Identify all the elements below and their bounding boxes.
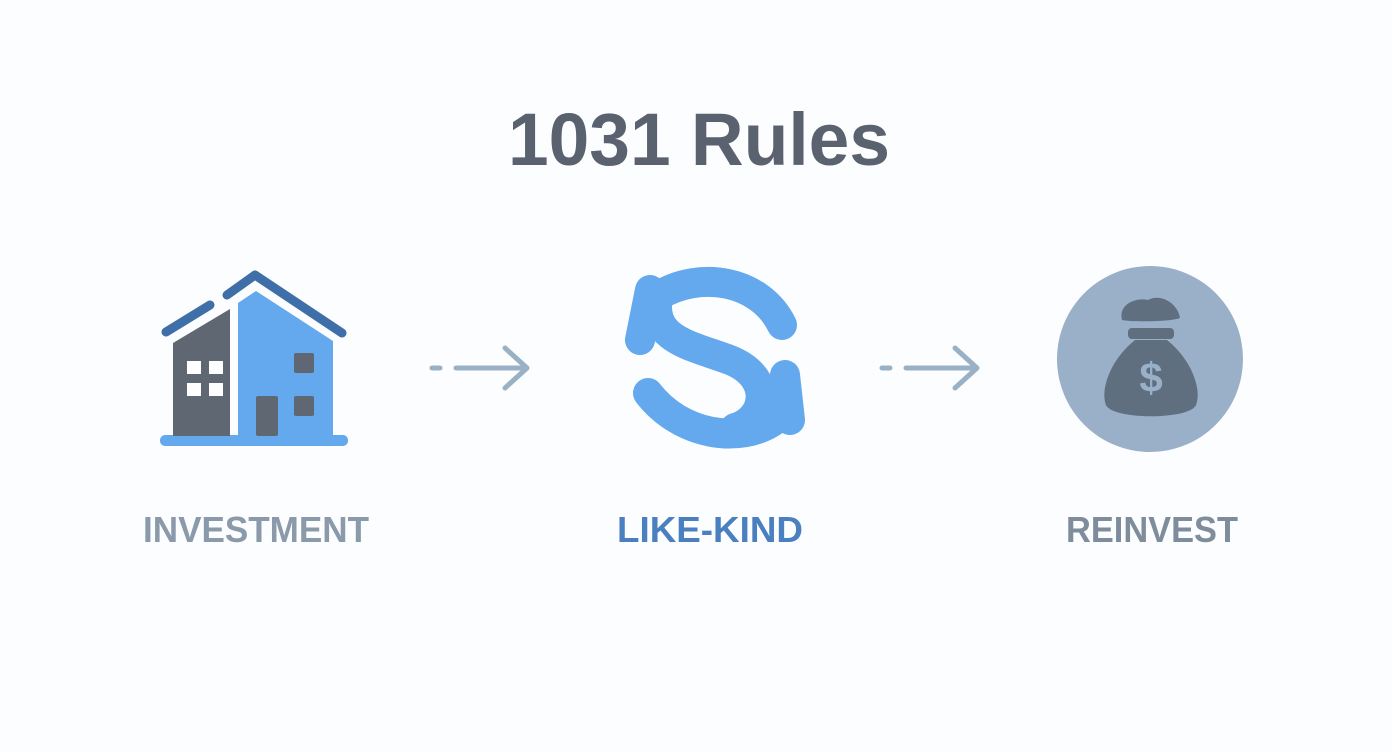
label: like-kind: LIKE-KIND [617,509,803,550]
icon: money bag circle [1057,266,1243,452]
icon: money bag circle: $ [1139,354,1163,401]
icon: exchange S [640,282,790,434]
arrow 2 [882,348,977,388]
arrow 1 [432,348,527,388]
label: investment: INVESTMENT [143,509,369,550]
label: reinvest: REINVEST [1066,509,1238,550]
icon: house [160,275,348,446]
title: 1031 Rules [508,98,890,181]
